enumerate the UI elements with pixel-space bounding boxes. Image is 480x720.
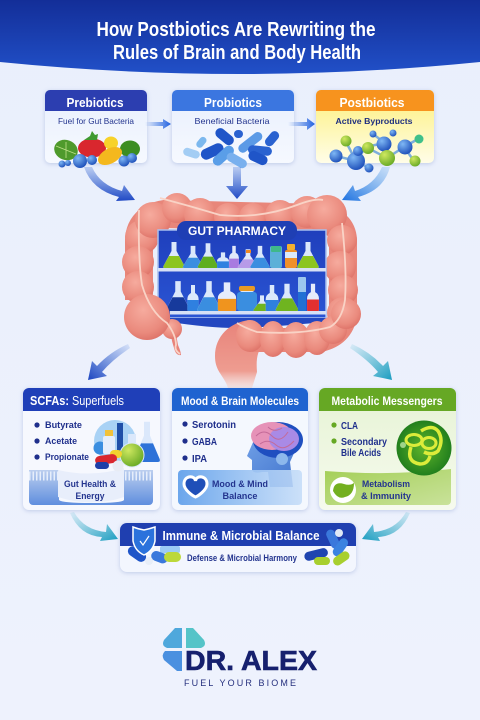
heading: SCFAs:Superfuels xyxy=(30,394,124,408)
panel: probiotics: Probiotics xyxy=(204,96,262,110)
colon: back segments xyxy=(122,193,359,329)
arrow: metabolic messengers to immune balance xyxy=(362,512,410,541)
arrow: gut to metabolic messengers xyxy=(350,344,392,380)
icon: shield and capsules xyxy=(126,527,181,565)
panel: mood and brain molecules xyxy=(172,388,308,510)
list: serotonin, GABA, IPA: GABA xyxy=(192,437,217,448)
callout: mood and mind balance: Mood & Mind xyxy=(212,479,268,490)
subheading: Defense & Microbial Harmony xyxy=(187,553,298,564)
callout: mood and mind balance xyxy=(178,470,302,505)
icon: fruits and berries xyxy=(51,131,140,169)
panel: prebiotics xyxy=(45,90,147,169)
illustration: gut pharmacy xyxy=(122,193,361,388)
list: serotonin, GABA, IPA: IPA xyxy=(192,454,207,465)
logo tagline: FUEL YOUR BIOME xyxy=(184,678,296,688)
list: butyrate, acetate, propionate: Butyrate xyxy=(45,420,82,431)
callout: gut health and energy xyxy=(29,468,153,505)
icon: probiotic capsules xyxy=(182,126,281,170)
list: butyrate, acetate, propionate xyxy=(34,420,89,463)
panel: postbiotics: Postbiotics xyxy=(340,96,405,110)
callout: gut health and energy: Gut Health & xyxy=(64,479,116,490)
list: butyrate, acetate, propionate: Acetate xyxy=(45,436,77,447)
label: gut pharmacy xyxy=(177,221,297,240)
icon: capsules right xyxy=(303,528,351,567)
colon: appendix xyxy=(162,319,182,355)
list: CLA, secondary bile acids xyxy=(331,421,387,459)
heading: Mood & Brain Molecules xyxy=(181,396,299,408)
bottom row of flasks xyxy=(166,277,319,311)
panel: probiotics: Beneficial Bacteria xyxy=(194,116,270,126)
panel: postbiotics: Active Byproducts xyxy=(336,116,413,126)
arrow: SCFAs to immune balance xyxy=(70,512,118,541)
colon: pale band xyxy=(139,198,346,354)
arrow: gut to SCFAs xyxy=(88,344,130,380)
heading: Metabolic Messengers xyxy=(332,396,442,408)
arrow: probiotics to postbiotics xyxy=(288,118,315,130)
header banner xyxy=(0,0,480,74)
colon: front segments xyxy=(124,294,361,388)
icon: molecule xyxy=(330,130,424,172)
icon: flasks and capsules xyxy=(94,420,160,472)
arrow: probiotics to gut xyxy=(226,167,248,199)
shelf unit xyxy=(158,230,326,328)
arrow: prebiotics to gut xyxy=(84,167,135,201)
callout: gut health and energy: Energy xyxy=(76,491,105,502)
list: serotonin, GABA, IPA xyxy=(182,420,236,465)
title: Rules of Brain and Body Health xyxy=(113,42,361,64)
panel: prebiotics: Prebiotics xyxy=(66,96,124,110)
callout: metabolism and immunity: Metabolism xyxy=(362,479,410,490)
callout: metabolism and immunity: & Immunity xyxy=(361,491,412,502)
logo: Dr. Alex xyxy=(163,628,317,688)
list: CLA, secondary bile acids: Secondary xyxy=(341,437,387,448)
callout: mood and mind balance: Balance xyxy=(222,491,258,502)
logo wordmark: DR. ALEX xyxy=(185,645,317,676)
panel: metabolic messengers xyxy=(319,388,456,510)
heading: Immune & Microbial Balance xyxy=(162,529,320,543)
icon: green molecule xyxy=(396,420,452,476)
panel: immune and microbial balance xyxy=(120,523,356,572)
list: butyrate, acetate, propionate: Propionate xyxy=(45,452,89,463)
label: gut pharmacy: GUT PHARMACY xyxy=(188,224,286,238)
panel: prebiotics: Fuel for Gut Bacteria xyxy=(58,116,134,126)
callout: metabolism and immunity xyxy=(325,469,451,505)
panel: probiotics xyxy=(172,90,294,170)
panel: postbiotics xyxy=(316,90,434,172)
title: How Postbiotics Are Rewriting the xyxy=(96,19,376,41)
list: CLA, secondary bile acids: CLA xyxy=(341,421,358,432)
logo clover mark xyxy=(163,628,205,671)
list: CLA, secondary bile acids: Bile Acids xyxy=(341,448,381,459)
arrow: prebiotics to probiotics xyxy=(145,119,171,129)
icon: head and brain xyxy=(247,422,303,487)
top row of flasks xyxy=(163,242,319,268)
title xyxy=(96,19,376,64)
arrow: postbiotics to gut xyxy=(342,167,390,201)
panel: SCFAs superfuels xyxy=(23,388,160,510)
list: serotonin, GABA, IPA: Serotonin xyxy=(192,420,236,431)
